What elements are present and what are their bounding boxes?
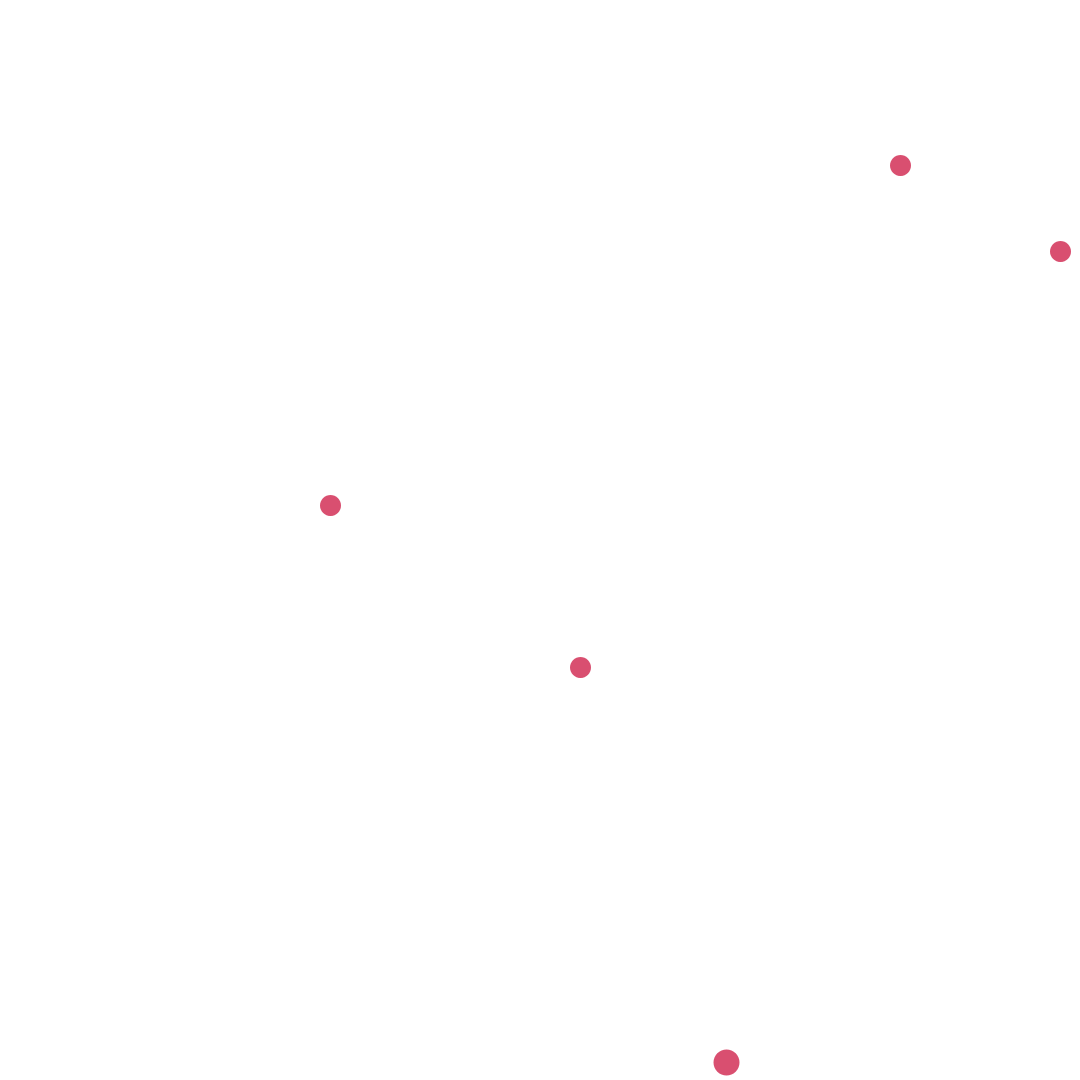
dot 4 [570,657,591,678]
dot 3 [320,495,341,516]
dot 2 [1050,241,1071,262]
dot 1 [890,155,911,176]
dot 5 [714,1050,740,1076]
